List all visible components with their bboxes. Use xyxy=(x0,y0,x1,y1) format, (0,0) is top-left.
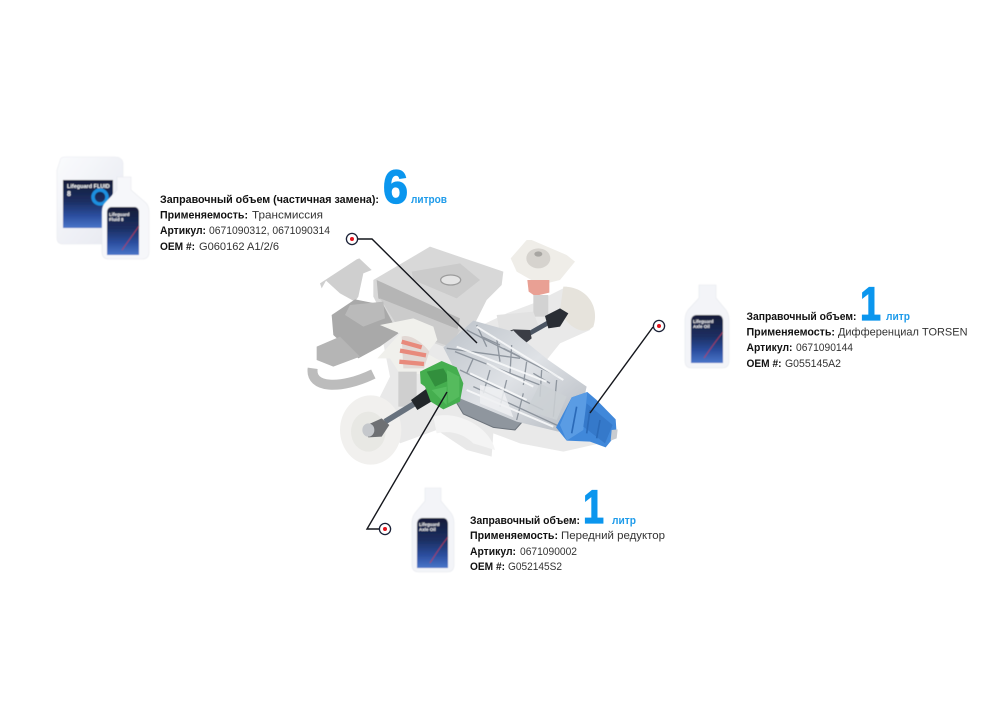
marker: front differential xyxy=(379,523,391,535)
illustration: drivetrain with engine and suspension xyxy=(313,240,618,465)
text block: front differential: 0671090002 xyxy=(520,546,577,558)
product: Lifeguard FLUID 8 canister and bottle xyxy=(57,157,149,259)
volume: 6 liters: 6 xyxy=(383,160,408,213)
text block: transmission: OEM #: xyxy=(160,241,195,253)
torsen differential, blue xyxy=(556,392,618,447)
canister xyxy=(57,157,123,244)
front differential, green xyxy=(420,361,463,409)
text block: front differential: Передний редуктор xyxy=(561,530,665,542)
canister: Lifeguard FLUID xyxy=(67,184,110,190)
text block: torsen differential: 0671090144 xyxy=(796,342,853,354)
text block: transmission: G060162 A1/2/6 xyxy=(199,241,279,253)
text block: front differential: G052145S2 xyxy=(508,561,562,573)
leader line: torsen differential xyxy=(590,320,665,413)
canister: 8 xyxy=(67,191,71,198)
left drive shaft xyxy=(362,387,434,437)
text block: transmission: Трансмиссия xyxy=(252,210,323,222)
volume: 6 liters xyxy=(383,160,447,213)
volume: 1 liter: 1 xyxy=(860,277,881,330)
volume: 6 liters: литров xyxy=(411,194,447,206)
left strut and spring xyxy=(377,318,442,407)
leader line: transmission xyxy=(346,233,477,343)
product: Lifeguard Axle Oil bottle, bottom xyxy=(412,488,454,572)
text block: front differential: Артикул: xyxy=(470,546,516,558)
volume: 1 liter: литр xyxy=(612,515,636,527)
text block: torsen differential: G055145A2 xyxy=(785,358,841,370)
marker: torsen differential xyxy=(653,320,665,332)
product: Lifeguard Axle Oil bottle, bottom: Lifeguard xyxy=(419,522,440,527)
text block: front differential: Применяемость: xyxy=(470,530,558,542)
text block: front differential xyxy=(470,480,665,573)
subframe and brake disc xyxy=(340,395,495,465)
text block: torsen differential: Заправочный объем: xyxy=(746,311,856,323)
volume: 1 liter: 1 xyxy=(583,480,604,533)
bottle: Lifeguard xyxy=(109,212,130,217)
gearbox housing xyxy=(443,321,587,432)
text block: torsen differential: OEM #: xyxy=(746,358,782,370)
ghosted engine and intake xyxy=(313,247,503,385)
volume: 1 liter: литр xyxy=(886,311,910,323)
text block: torsen differential xyxy=(746,277,968,370)
product: Lifeguard Axle Oil bottle, right: Axle Oil xyxy=(693,324,710,329)
right strut and brake disc xyxy=(497,240,595,333)
bottle: Fluid 8 xyxy=(109,217,124,222)
right drive shaft xyxy=(500,308,568,345)
oil pan xyxy=(455,397,524,430)
text block: transmission xyxy=(160,160,447,253)
text block: torsen differential: Артикул: xyxy=(746,342,792,354)
text block: transmission: Заправочный объем (частичная замена): xyxy=(160,194,379,206)
marker: transmission xyxy=(346,233,358,245)
ghosted base mass behind the parts xyxy=(377,287,600,457)
text block: torsen differential: Применяемость: xyxy=(746,326,835,338)
text block: transmission: 0671090312, 0671090314 xyxy=(209,225,330,237)
text block: front differential: Заправочный объем: xyxy=(470,515,580,527)
text block: torsen differential: Дифференциал TORSEN xyxy=(838,326,968,338)
product: Lifeguard Axle Oil bottle, right: Lifeguard xyxy=(693,319,714,324)
product: Lifeguard Axle Oil bottle, bottom: Axle Oil xyxy=(419,527,436,532)
text block: front differential: OEM #: xyxy=(470,561,505,573)
text block: transmission: Артикул: xyxy=(160,225,206,237)
text block: transmission: Применяемость: xyxy=(160,210,248,222)
volume: 1 liter xyxy=(860,277,910,330)
leader line: front differential xyxy=(367,392,447,535)
volume: 1 liter xyxy=(583,480,636,533)
bottle xyxy=(102,177,149,259)
product: Lifeguard Axle Oil bottle, right xyxy=(685,285,729,368)
